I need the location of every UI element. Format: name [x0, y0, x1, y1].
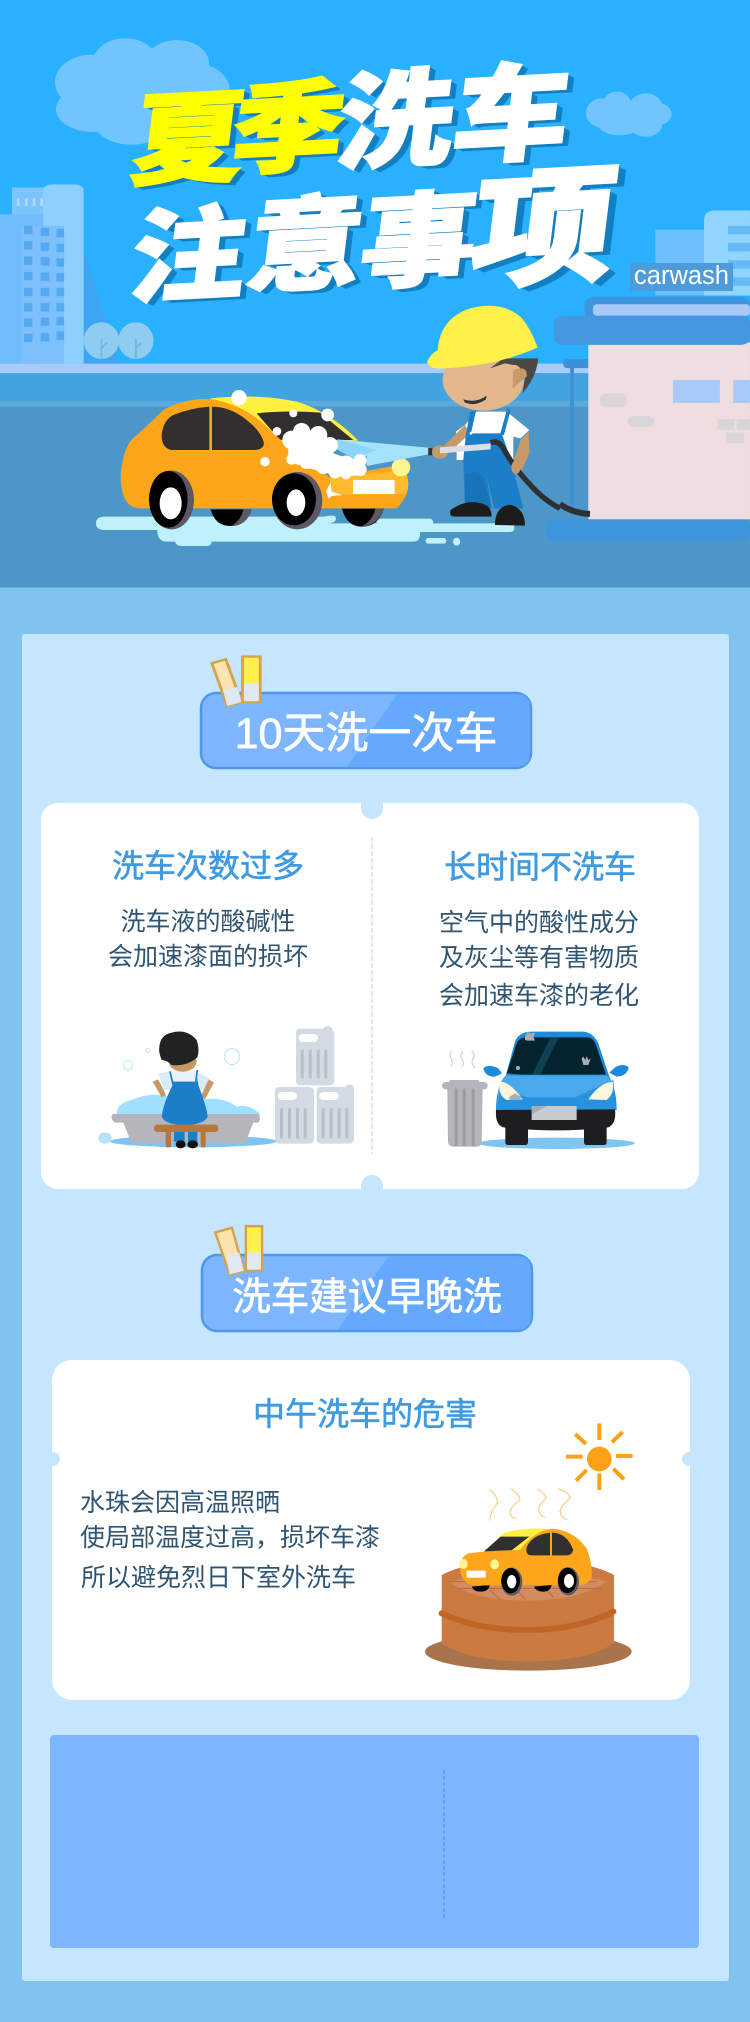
panel: washing frequency card	[41, 803, 699, 1189]
card body: 水珠会因高温照晒	[80, 1489, 280, 1517]
hard hat	[427, 306, 538, 369]
column divider	[371, 837, 373, 1154]
worker	[428, 349, 560, 526]
left column body: 会加速漆面的损坏	[108, 943, 308, 971]
right column heading: 长时间不洗车	[444, 849, 636, 885]
card notches	[361, 803, 383, 1189]
right column body: 及灰尘等有害物质	[439, 944, 639, 972]
icon: right city buildings	[655, 210, 750, 295]
title: 注	[123, 170, 257, 324]
steamer basket	[442, 1560, 614, 1662]
empty blue footer panel	[50, 1735, 699, 1948]
right column body: 会加速车漆的老化	[439, 982, 639, 1010]
wheels	[149, 471, 194, 529]
title: 季	[225, 44, 355, 196]
panel: hero scene	[0, 0, 750, 587]
icon: tubes	[212, 657, 260, 706]
card body: 使局部温度过高，损坏车漆	[80, 1524, 380, 1552]
section 1 heading	[201, 657, 531, 768]
card base	[41, 803, 699, 1189]
illustration: sun over car on steamer	[425, 1423, 633, 1671]
left column body	[108, 908, 308, 971]
icon: trees	[84, 322, 154, 359]
card notches	[52, 1452, 690, 1466]
carwash tag: carwash	[634, 262, 729, 290]
main content panel	[22, 634, 729, 1981]
heading text: 10天洗一次车	[235, 710, 497, 758]
right column body: 空气中的酸性成分	[439, 909, 639, 937]
title: 项	[462, 122, 628, 314]
foam	[231, 390, 367, 479]
water puddles	[96, 516, 514, 546]
heading badge	[201, 693, 531, 768]
title: 车	[446, 26, 580, 186]
sky	[0, 0, 750, 366]
heading text: 洗车建议早晚洗	[232, 1276, 502, 1319]
small car	[459, 1529, 592, 1596]
illustration: dirty blue car and trash can	[442, 1032, 635, 1149]
steamer shadow	[425, 1633, 632, 1671]
icon: car wash shop	[545, 297, 750, 541]
right column body	[439, 909, 639, 1010]
car roof and windshield	[210, 396, 358, 443]
card base	[52, 1360, 690, 1700]
title	[123, 26, 628, 324]
water spray	[337, 439, 428, 466]
left column heading: 洗车次数过多	[112, 848, 304, 884]
card body	[80, 1489, 380, 1592]
title: 洗	[330, 32, 464, 192]
car body	[121, 399, 408, 508]
car windows	[162, 407, 209, 450]
card body: 所以避免烈日下室外洗车	[81, 1564, 356, 1592]
left column body: 洗车液的酸碱性	[120, 908, 296, 936]
section 2 heading	[202, 1226, 532, 1331]
heading badge	[202, 1255, 532, 1331]
icon: small cloud	[586, 91, 672, 137]
panel: midday washing card	[52, 1360, 690, 1700]
far wheels	[211, 509, 252, 526]
card heading: 中午洗车的危害	[253, 1396, 477, 1432]
icon: sun	[566, 1423, 633, 1490]
heat waves	[490, 1489, 570, 1521]
illustration: child washing beside jerry cans	[98, 1026, 354, 1148]
illustration: car being washed	[96, 349, 560, 546]
icon: left city buildings	[0, 184, 120, 364]
title: 事	[353, 156, 487, 310]
title: 意	[240, 160, 374, 314]
ground road	[0, 364, 750, 587]
icon: tubes	[215, 1226, 262, 1274]
icon: large cloud	[55, 38, 230, 145]
hose end	[560, 504, 590, 514]
headlight and plate	[392, 458, 410, 476]
title: 夏	[125, 55, 255, 207]
